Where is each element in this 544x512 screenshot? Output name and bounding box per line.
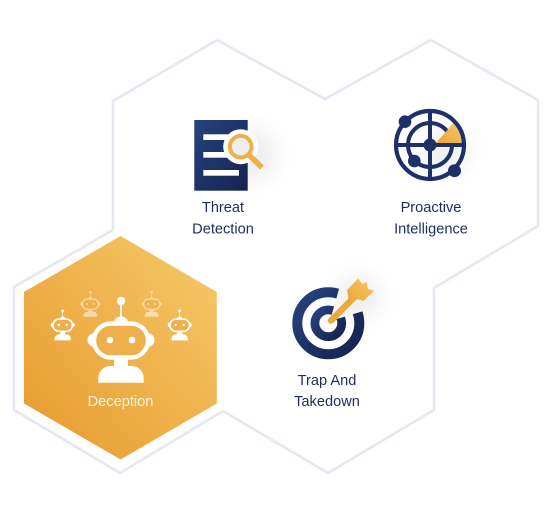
panel: proactive intelligence [394, 110, 469, 237]
icon: target with arrow [297, 276, 380, 354]
label: Proactive Intelligence: Intelligence [394, 221, 468, 237]
label: Deception: Deception [88, 394, 153, 410]
label: Trap And Takedown: Trap And [298, 373, 356, 389]
label: Threat Detection: Threat [202, 200, 244, 216]
label: Threat Detection: Detection [192, 221, 254, 237]
panel: threat detection [192, 120, 276, 237]
panel: deception hexagon [24, 236, 217, 460]
label: Proactive Intelligence: Proactive [401, 200, 461, 216]
icon: document with magnifier [194, 120, 262, 191]
icon: robots [51, 291, 192, 383]
label: Trap And Takedown: Takedown [294, 394, 360, 410]
icon: radar [395, 110, 465, 180]
panel: trap and takedown [294, 276, 380, 410]
